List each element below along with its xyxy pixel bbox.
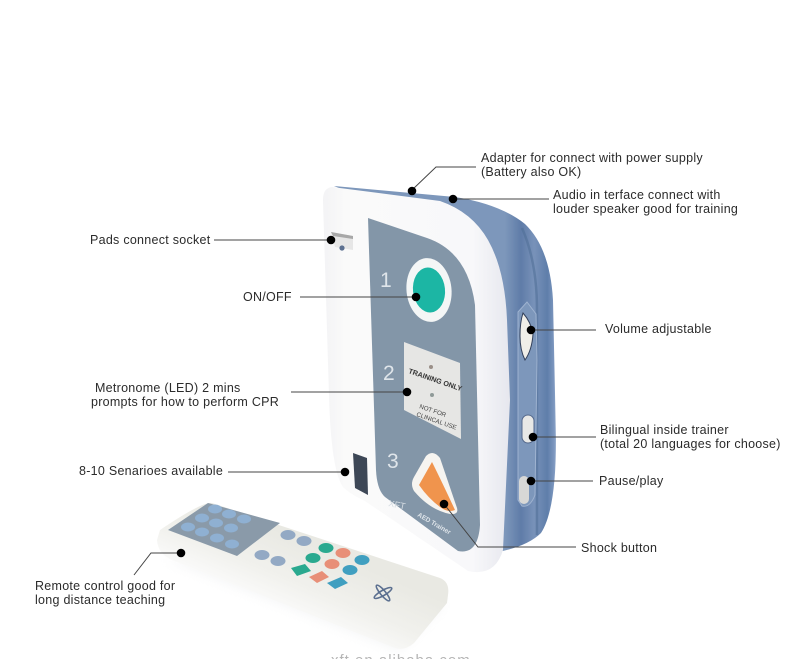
salmon keys — [309, 548, 350, 583]
label: pads socket: Pads connect socket — [90, 233, 211, 247]
label: bilingual: Bilingual inside trainer — [600, 423, 729, 437]
remote shadow — [165, 560, 445, 652]
training only label — [404, 342, 463, 439]
label: scenarios: 8-10 Senarioes available — [79, 464, 223, 478]
label: metronome: Metronome (LED) 2 mins — [95, 381, 241, 395]
label: volume: Volume adjustable — [605, 322, 712, 336]
teal keys — [291, 543, 334, 576]
device: AED trainer — [323, 186, 556, 572]
label: shock button: Shock button — [581, 541, 657, 555]
label: remote control: Remote control good for — [35, 579, 175, 593]
label: audio interface: louder speaker good for training — [553, 202, 738, 216]
front colour panel — [368, 218, 480, 551]
callout lines and dots — [134, 167, 596, 575]
remote logo — [373, 584, 393, 602]
training only label: TRAINING ONLY — [407, 366, 463, 393]
training only label: CLINICAL USE — [415, 411, 457, 432]
label: bilingual: (total 20 languages for choose) — [600, 437, 781, 451]
volume wheel — [520, 313, 533, 360]
side groove — [522, 228, 537, 535]
device product name: AED Trainer — [416, 512, 452, 537]
LED display window — [353, 453, 368, 495]
device side housing — [334, 186, 556, 552]
remote keypad panel — [168, 503, 280, 556]
label: metronome: prompts for how to perform CPR — [91, 395, 279, 409]
remote control — [157, 503, 448, 652]
blue number keys — [181, 504, 251, 548]
label: power adapter: (Battery also OK) — [481, 165, 581, 179]
shock button — [412, 453, 457, 514]
device front shell — [323, 187, 510, 572]
ON/OFF button — [403, 256, 455, 324]
pads connect socket — [331, 232, 353, 251]
panel number 3: 3 — [387, 450, 399, 473]
training only label: NOT FOR — [418, 403, 447, 419]
label: audio interface: Audio in terface connect with — [553, 188, 721, 202]
label: pause/play: Pause/play — [599, 474, 664, 488]
side control strip — [518, 302, 537, 506]
label: remote control: long distance teaching — [35, 593, 165, 607]
remote body — [157, 503, 448, 649]
label: power adapter: Adapter for connect with power supply — [481, 151, 703, 165]
device logo: XFT — [388, 498, 407, 512]
blue action keys — [327, 555, 370, 589]
language switch — [522, 415, 534, 443]
panel number 1: 1 — [380, 269, 392, 292]
gray-blue keys — [254, 530, 312, 566]
pause play button — [519, 476, 529, 504]
label: on/off: ON/OFF — [243, 290, 292, 304]
panel number 2: 2 — [383, 362, 395, 385]
